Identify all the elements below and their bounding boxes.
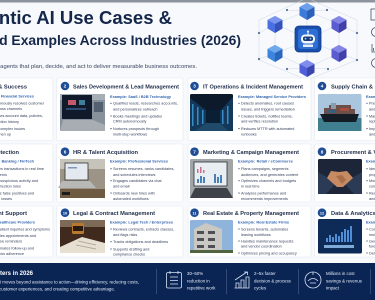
card 11 bullets: Optimizes pricing and occupancy [241, 251, 297, 255]
stat: reduction: repetitive work [187, 286, 216, 290]
card 2 image: laptop [60, 94, 105, 131]
card 3 bullets: Creates tickets, notifies teams, [241, 114, 293, 118]
card 7 bullets: Analyzes performance and [241, 191, 286, 195]
card 2 bullets [110, 102, 178, 136]
card 2 bullets: multi-step workflows [113, 132, 147, 136]
card 6 image: laptop on desk [58, 159, 105, 198]
card 9 bullets [0, 227, 50, 256]
card 7 bullets: in real time [241, 184, 260, 188]
badge 11: 11 [192, 211, 197, 215]
card 10 bullets: Reviews contracts, extracts clauses, [113, 227, 174, 231]
card 11 bullets: Handles maintenance requests [241, 239, 293, 243]
card 12: data and analytics [314, 206, 375, 257]
card 2 example: Example: SaaS / B2B Technology [110, 95, 172, 99]
stat: faster decisions: 2–5x faster [254, 271, 276, 276]
badge 10: 10 [63, 211, 67, 215]
card 3 image: server room [190, 94, 233, 131]
card 3 bullets: Detects anomalies, root causes [241, 102, 294, 106]
card 6 example: Example: Professional Services [110, 160, 168, 164]
icon: savings circle [305, 272, 321, 288]
card 10 bullets: compliance checks [113, 253, 145, 257]
card 7 heading: Marketing & Campaign Management [203, 150, 299, 156]
card 7 bullets: recommends improvements [241, 197, 288, 201]
card 7 bullets: audiences, and generates content [241, 173, 299, 177]
badge 8: 8 [321, 149, 324, 154]
icon: violet cube [300, 60, 314, 77]
card 11 image: apartment building [190, 220, 233, 253]
stat: savings: impact [326, 286, 340, 290]
card 10 bullets [110, 227, 174, 257]
card 8 image: handshake [318, 159, 362, 194]
card 6: HR and talent acquisition [56, 144, 183, 202]
badge 12: 12 [320, 211, 324, 215]
card 7: marketing and campaign management [188, 144, 311, 202]
card 2: sales development [56, 78, 183, 140]
card 6 bullets: Onboards new hires with [113, 191, 155, 195]
card 1: customer service [0, 78, 53, 140]
badge 2: 2 [64, 84, 67, 89]
card 3: IT operations [188, 78, 311, 140]
stat: faster decisions: cycles [254, 286, 267, 290]
icon: violet cube [332, 16, 346, 33]
card 5 bullets: losses [1, 197, 12, 201]
card 10 image: gavel and papers [60, 220, 105, 253]
badge 7: 7 [193, 149, 196, 154]
card 3 example: Example: Managed Service Providers [238, 95, 306, 99]
card 7 bullets: Optimizes channels and budgets [241, 179, 296, 183]
icon: blue cube [268, 16, 282, 33]
network graphic: AI robot and cubes [258, 0, 358, 80]
icons: header side list [371, 9, 375, 68]
icon: rising bar chart [234, 272, 250, 288]
card 11 example: Example: Real Estate Firms [238, 220, 289, 224]
footer message [0, 271, 139, 292]
card 7 bullets: Plans campaigns, segments [241, 167, 289, 171]
icon: blue cube [300, 3, 314, 20]
footer band [0, 263, 375, 300]
card 8 bullets [366, 167, 375, 201]
icon: blue cube [268, 45, 282, 62]
icon: robot tile [295, 26, 321, 52]
card 10 bullets: and flags risks [113, 233, 137, 237]
card 5: fraud detection [0, 144, 53, 202]
card 7 example: Example: Retail / eCommerce [238, 160, 293, 164]
card 6 bullets: and schedules interviews [113, 173, 156, 177]
stat: faster decisions [254, 271, 292, 290]
card 12 image: dashboard [318, 219, 362, 254]
card 6 bullets: Screens resumes, ranks candidates, [113, 167, 174, 171]
card 11 bullets: leasing workflows [241, 233, 271, 237]
card 3 bullets: runbooks [241, 132, 257, 136]
card 1 bullets [0, 102, 45, 136]
stat: savings: savings & revenue [326, 278, 363, 284]
icon: violet cube [332, 45, 346, 62]
card 6 heading: HR & Talent Acquisition [73, 150, 139, 156]
badge 4: 4 [321, 84, 324, 89]
card 5 bullets [0, 167, 44, 201]
card 4 image: container ship [318, 94, 362, 131]
card 4 bullets [366, 102, 375, 136]
card 11 bullets: and vendor coordination [241, 244, 282, 248]
card 3 bullets: issues, and triggers remediation [241, 108, 295, 112]
stat: reduction [187, 271, 216, 290]
card 6 bullets: and email [113, 184, 130, 188]
title [0, 7, 241, 48]
card 6 bullets [110, 167, 174, 201]
badge 3: 3 [193, 84, 196, 89]
card 7 bullets [238, 167, 299, 201]
card 3 heading: IT Operations & Incident Management [203, 84, 303, 90]
badge 6: 6 [64, 149, 67, 154]
card 4: supply chain [314, 78, 375, 140]
card 3 bullets: and verifies resolution [241, 120, 278, 124]
card 2 bullets: Nurtures prospects through [113, 127, 159, 131]
card 2 bullets: Qualifies leads, researches accounts, [113, 102, 178, 106]
card 12 bullets [366, 227, 375, 255]
card 2 heading: Sales Development & Lead Management [73, 84, 179, 90]
stat: faster decisions: decision & process [254, 278, 292, 284]
card 2 bullets: CRM autonomously [113, 120, 146, 124]
card 10 example: Example: Legal Tech / Enterprises [110, 220, 173, 224]
card 11 heading: Real Estate & Property Management [203, 211, 299, 217]
card 10 bullets: Supports drafting and [113, 247, 149, 251]
card 3 bullets [238, 102, 295, 136]
card 11 bullets [238, 227, 297, 255]
card 11 bullets: Screens tenants, automates [241, 227, 288, 231]
icon: clipboard [166, 271, 182, 288]
card 2 bullets: Books meetings and updates [113, 114, 162, 118]
card 7 image: analytics laptop [190, 159, 233, 198]
card 6 bullets: Engages candidates via chat [113, 179, 162, 183]
card 10 heading: Legal & Contract Management [73, 211, 155, 217]
card 10: legal and contract management [56, 206, 183, 257]
stat: savings [326, 271, 363, 290]
card 11: real estate and property management [188, 206, 311, 257]
card 3 bullets: Reduces MTTR with automated [241, 127, 294, 131]
stat: reduction: 30–50% [187, 271, 203, 276]
card 6 bullets: automated workflows [113, 197, 149, 201]
card 12 heading: Data & Analytics [331, 211, 375, 217]
card 2 bullets: and personalizes outreach [113, 108, 158, 112]
card 10 bullets: Tracks obligations and deadlines [113, 240, 168, 244]
stat: savings: Millions in cost [326, 271, 355, 276]
card 8: procurement and vendor management [314, 144, 375, 202]
card 9: patient support [0, 206, 53, 257]
stat: reduction: reduction in [187, 278, 210, 284]
